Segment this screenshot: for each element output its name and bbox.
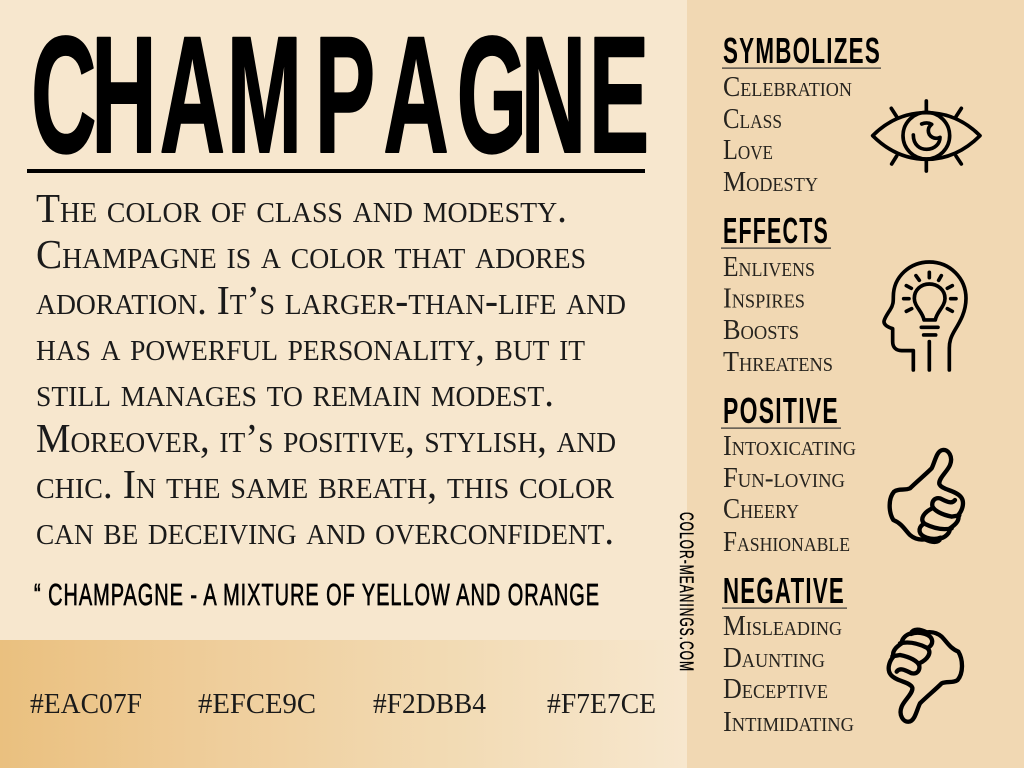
panel: left background <box>0 0 687 768</box>
list: negative: Deceptive <box>723 674 828 705</box>
section: symbolizes <box>722 30 881 198</box>
text block: description: The color of class and modesty. <box>36 185 567 231</box>
heading: effects: EFFECTS <box>723 210 829 251</box>
title rule <box>27 169 645 173</box>
list: effects <box>723 252 833 378</box>
heading: negative: NEGATIVE <box>723 570 845 611</box>
list: symbolizes: Class <box>723 104 782 135</box>
heading: positive: POSITIVE <box>723 390 839 431</box>
list: effects: Threatens <box>723 347 833 378</box>
text block: description: Champagne is a color that adores <box>36 231 586 277</box>
list: symbolizes: Celebration <box>723 72 852 103</box>
text block: description: Moreover, it’s positive, stylish, and <box>36 415 616 461</box>
list: symbolizes: Modesty <box>723 167 818 198</box>
icon: head with light bulb <box>884 262 966 370</box>
list: negative <box>723 611 854 738</box>
hex codes: #F2DBB4 <box>373 688 486 720</box>
colour gradient band <box>0 640 687 768</box>
text block: description: still manages to remain modest. <box>36 369 554 415</box>
list: effects: Enlivens <box>723 252 815 283</box>
text block: description <box>36 185 626 553</box>
section: effects <box>721 210 833 378</box>
heading: symbolizes: SYMBOLIZES <box>723 30 881 71</box>
hex codes: #EFCE9C <box>198 688 316 720</box>
quote line: “ CHAMPAGNE - A MIXTURE OF YELLOW AND ORANGE <box>34 577 600 612</box>
section: positive <box>721 390 856 558</box>
icon: thumbs down <box>889 630 962 722</box>
panel: right sidebar <box>687 0 1024 768</box>
list: negative: Intimidating <box>723 707 854 738</box>
list: negative: Daunting <box>723 643 825 674</box>
list: symbolizes: Love <box>723 135 773 166</box>
title: CHAMPAGNE <box>31 3 649 188</box>
list: positive: Fun-loving <box>723 463 845 494</box>
section: negative <box>722 570 854 738</box>
list: positive: Intoxicating <box>723 431 856 462</box>
list: positive <box>723 431 856 558</box>
vertical site credit: COLOR-MEANINGS.COM <box>675 512 696 672</box>
text block: description: can be deceiving and overconfident. <box>36 507 614 553</box>
list: negative: Misleading <box>723 611 842 642</box>
hex codes: #F7E7CE <box>547 688 656 720</box>
list: symbolizes <box>723 72 852 198</box>
icon: eye <box>873 101 980 171</box>
text block: description: adoration. It’s larger-than-life and <box>36 277 626 323</box>
text block: description: chic. In the same breath, this color <box>36 461 615 507</box>
hex codes <box>30 688 656 720</box>
list: positive: Cheery <box>723 494 799 525</box>
list: positive: Fashionable <box>723 527 850 558</box>
text block: description: has a powerful personality, but it <box>36 323 585 369</box>
list: effects: Boosts <box>723 315 799 346</box>
icon: thumbs up <box>890 450 963 542</box>
hex codes: #EAC07F <box>30 688 142 720</box>
list: effects: Inspires <box>723 284 805 314</box>
